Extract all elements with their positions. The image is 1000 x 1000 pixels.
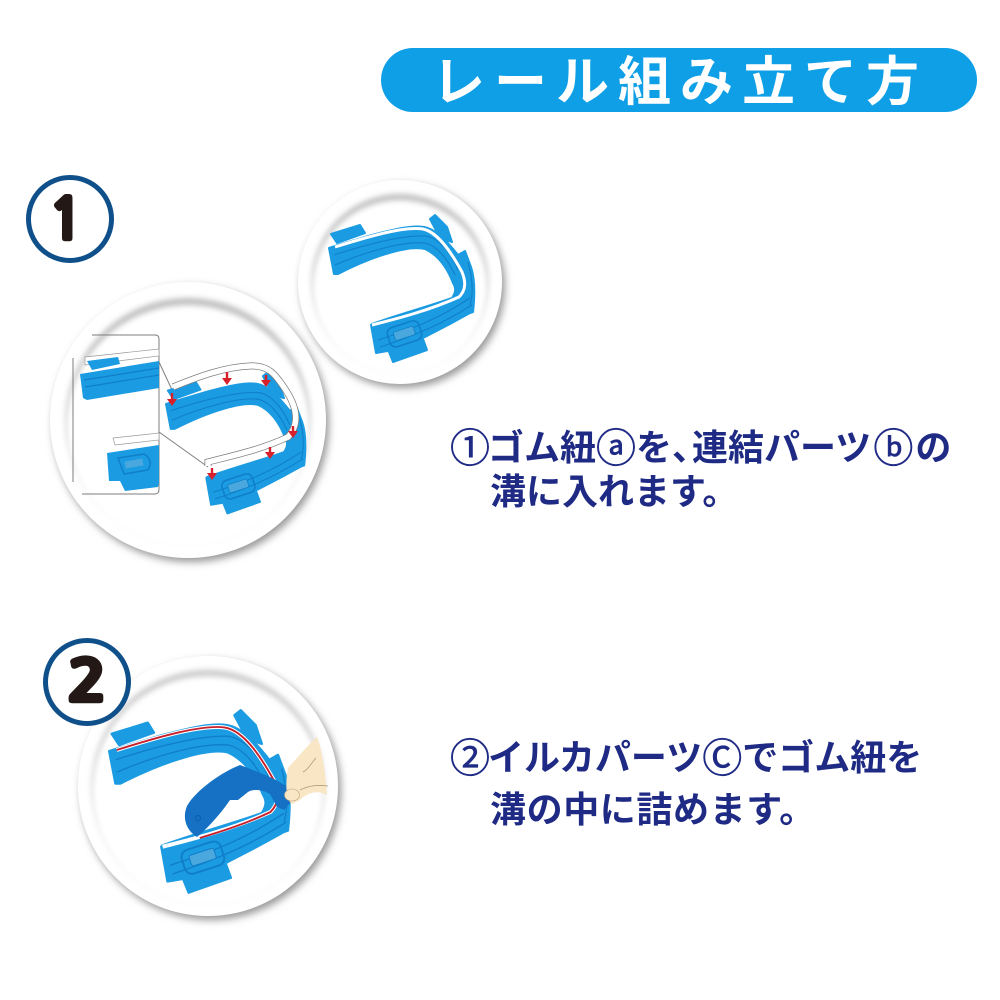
step number 2 badge: 2 (68, 655, 106, 710)
red band line in groove (117, 727, 278, 838)
hand (284, 737, 328, 804)
step number 1 badge (28, 178, 112, 260)
instruction text step 2: イルカパーツ でゴム紐を (488, 737, 922, 778)
detail inset frame (73, 335, 208, 494)
instruction text step 1: ⓐ (596, 427, 636, 471)
instruction text step 1: 、 (672, 427, 708, 468)
title pill: レール組み立て方 (432, 53, 928, 112)
instruction text step 1 (450, 427, 951, 512)
step number 2 badge (46, 640, 128, 724)
inset: lower rail detail (107, 433, 159, 491)
step number 1 badge: 1 (49, 193, 83, 248)
photo circle: inserting band (50, 282, 329, 562)
rail part, large (109, 710, 289, 893)
instruction text step 1: ① (450, 427, 490, 471)
instruction text step 2 (450, 737, 922, 830)
inset: upper rail detail (80, 349, 159, 400)
instruction text step 1: ゴム紐 を 連結パーツ の (488, 427, 951, 468)
photo circle: finished rail with band (298, 180, 505, 388)
rail part, top right (329, 215, 474, 362)
dolphin part (185, 765, 293, 837)
instruction text step 2: ② (450, 737, 490, 781)
instruction text step 2: Ⓒ (702, 737, 742, 781)
instruction text step 1: ⓑ (873, 427, 913, 471)
rail part with band and red arrows (166, 366, 305, 513)
instruction text step 2: 溝の中に詰めます。 (490, 789, 816, 830)
instruction text step 1: 溝に入れます。 (490, 471, 738, 512)
photo circle: pressing band with dolphin part (78, 656, 341, 920)
